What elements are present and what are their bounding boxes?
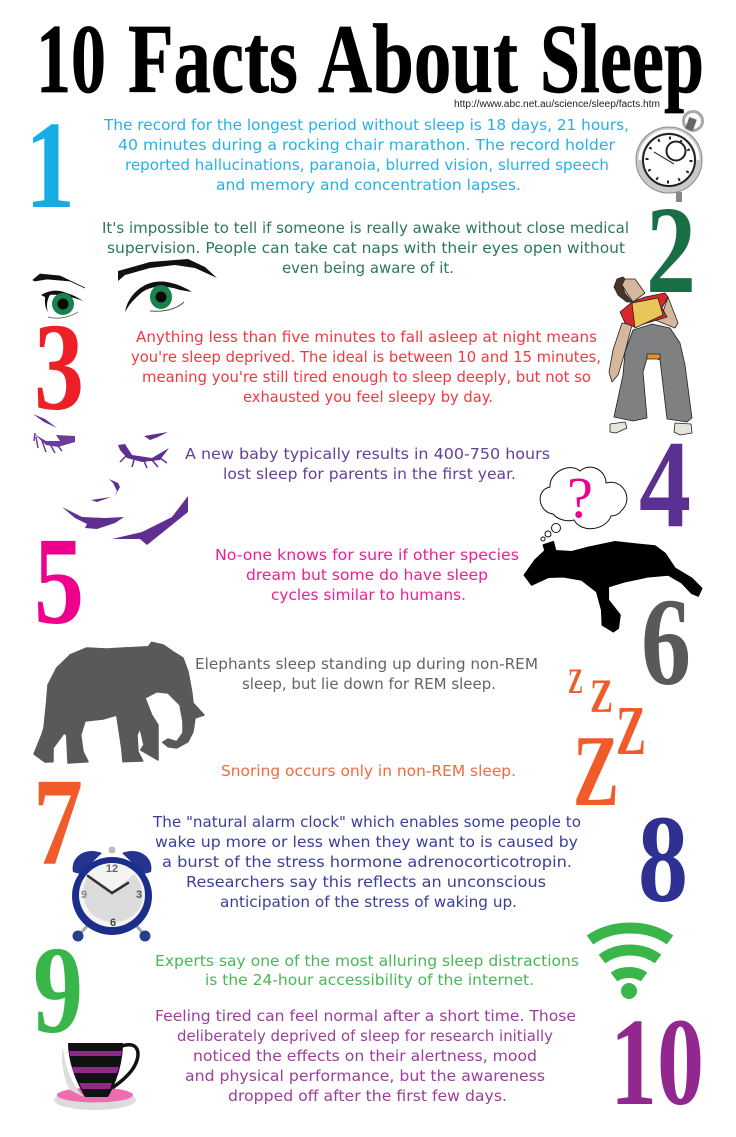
icon: alarm clock: 9 bbox=[81, 889, 87, 901]
icon: thought bubble bbox=[540, 465, 627, 541]
fact 2 text: supervision. People can take cat naps with their eyes open without bbox=[107, 239, 625, 257]
fact 8 text: The "natural alarm clock" which enables some people to bbox=[152, 813, 581, 831]
fact 10 text: dropped off after the first few days. bbox=[228, 1087, 507, 1105]
fact 10 text: deliberately deprived of sleep for research initially bbox=[177, 1027, 553, 1045]
fact 8 text: wake up more or less when they want to is caused by bbox=[155, 833, 578, 851]
fact 1 text: 40 minutes during a rocking chair marathon. The record holder bbox=[118, 136, 616, 154]
icon: zzz bbox=[568, 661, 646, 828]
number 3: 3 bbox=[34, 299, 84, 437]
icon: striped cup and saucer bbox=[54, 1043, 138, 1110]
fact 1 text: The record for the longest period without sleep is 18 days, 21 hours, bbox=[103, 116, 629, 134]
fact 6 text: sleep, but lie down for REM sleep. bbox=[242, 675, 496, 693]
number 5: 5 bbox=[34, 513, 84, 651]
number 1: 1 bbox=[25, 97, 75, 235]
fact 10 text: and physical performance, but the awareness bbox=[185, 1067, 545, 1085]
icon: elephant bbox=[34, 642, 204, 763]
icon: alarm clock: 12 bbox=[106, 863, 118, 875]
fact 8 text: a burst of the stress hormone adrenocorticotropin. bbox=[162, 853, 572, 871]
fact 3 text: you're sleep deprived. The ideal is between 10 and 15 minutes, bbox=[131, 348, 601, 366]
icon: zzz: Z bbox=[590, 670, 613, 723]
fact 8 text bbox=[152, 813, 581, 911]
fact 3 text bbox=[131, 328, 601, 406]
fact 3 text: meaning you're still tired enough to sleep deeply, but not so bbox=[142, 368, 591, 386]
fact 2 text: It's impossible to tell if someone is really awake without close medical bbox=[102, 219, 629, 237]
title bbox=[36, 5, 704, 114]
icon: zzz: Z bbox=[568, 661, 583, 701]
fact 6 text: Elephants sleep standing up during non-REM bbox=[195, 655, 538, 673]
icon: sleeping animal silhouette bbox=[524, 542, 702, 632]
fact 1 text: and memory and concentration lapses. bbox=[216, 176, 521, 194]
fact 1 text bbox=[103, 116, 629, 194]
fact 3 text: exhausted you feel sleepy by day. bbox=[243, 388, 493, 406]
icon: alarm clock: 6 bbox=[110, 917, 116, 929]
fact 2 text bbox=[102, 219, 629, 277]
fact 10 text bbox=[155, 1007, 576, 1105]
fact 8 text: anticipation of the stress of waking up. bbox=[220, 893, 517, 911]
icon: wifi bbox=[590, 928, 670, 999]
icon: alarm clock: 3 bbox=[136, 889, 142, 901]
fact 7 text: Snoring occurs only in non-REM sleep. bbox=[221, 762, 516, 780]
number 4: 4 bbox=[639, 416, 691, 554]
number 2: 2 bbox=[646, 182, 696, 320]
icon: open eyes bbox=[33, 259, 217, 318]
fact 8 text: Researchers say this reflects an unconscious bbox=[186, 873, 546, 891]
number 8: 8 bbox=[638, 791, 688, 929]
icon: sleeping woman bbox=[609, 277, 692, 435]
title: 10 bbox=[36, 5, 106, 114]
number 6: 6 bbox=[641, 574, 691, 712]
title: About bbox=[318, 5, 518, 114]
fact 2 text: even being aware of it. bbox=[282, 259, 454, 277]
icon: stopwatch bbox=[636, 112, 702, 202]
fact 5 text: cycles similar to humans. bbox=[271, 586, 466, 604]
number 10: 10 bbox=[610, 994, 704, 1132]
icon: zzz: Z bbox=[573, 715, 619, 828]
fact 10 text: noticed the effects on their alertness, mood bbox=[193, 1047, 537, 1065]
fact 5 text: No-one knows for sure if other species bbox=[215, 546, 519, 564]
fact 3 text: Anything less than five minutes to fall asleep at night means bbox=[136, 328, 597, 346]
icon: thought bubble: ? bbox=[567, 465, 593, 530]
source url: http://www.abc.net.au/science/sleep/facts.htm bbox=[454, 99, 660, 110]
fact 9 text: is the 24-hour accessibility of the internet. bbox=[205, 971, 534, 989]
fact 4 text: A new baby typically results in 400-750 hours bbox=[185, 445, 550, 463]
icon: sleeping face bbox=[33, 414, 188, 545]
fact 9 text bbox=[155, 952, 579, 989]
fact 4 text: lost sleep for parents in the first year. bbox=[223, 465, 516, 483]
number 7: 7 bbox=[33, 754, 83, 892]
fact 5 text bbox=[215, 546, 519, 604]
fact 6 text bbox=[195, 655, 538, 693]
title: Facts bbox=[128, 5, 298, 114]
fact 1 text: reported hallucinations, paranoia, blurred vision, slurred speech bbox=[125, 156, 609, 174]
fact 5 text: dream but some do have sleep bbox=[246, 566, 488, 584]
fact 10 text: Feeling tired can feel normal after a short time. Those bbox=[155, 1007, 576, 1025]
number 9: 9 bbox=[33, 922, 83, 1060]
fact 9 text: Experts say one of the most alluring sleep distractions bbox=[155, 952, 579, 970]
fact 4 text bbox=[185, 445, 550, 483]
icon: zzz: Z bbox=[616, 693, 646, 770]
icon: alarm clock bbox=[72, 846, 152, 942]
